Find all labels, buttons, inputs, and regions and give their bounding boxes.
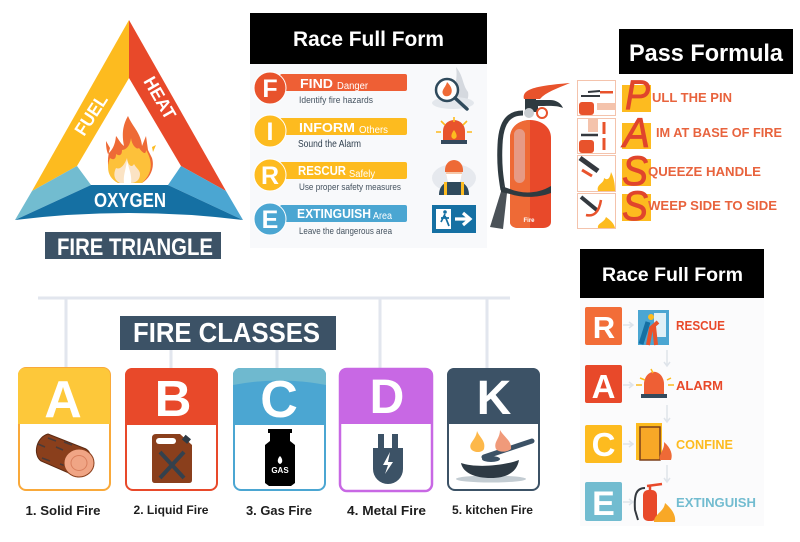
card K: kitchen fire: K — [477, 372, 512, 425]
card K: kitchen fire: 5. kitchen Fire — [452, 503, 533, 517]
card A: solid fire: 1. Solid Fire — [26, 503, 100, 518]
card B: liquid fire: B — [155, 370, 191, 427]
label: fire triangle: FIRE TRIANGLE — [57, 234, 213, 261]
triangle side: fuel: FUEL — [71, 91, 112, 139]
step: squeeze handle: S — [622, 147, 648, 194]
card K: kitchen fire — [447, 368, 540, 517]
heading: race full form — [250, 13, 487, 64]
card B: liquid fire — [125, 368, 218, 517]
row: alarm — [585, 365, 723, 405]
card A: solid fire — [18, 368, 110, 518]
card C: gas fire: GAS — [271, 466, 289, 475]
row: find danger: Danger — [337, 81, 369, 92]
step: sweep side to side: S — [622, 182, 648, 229]
tree connector lines — [38, 298, 510, 368]
triangle side: fuel — [32, 20, 129, 191]
row: extinguish — [585, 482, 756, 523]
row: extinguish: E — [592, 485, 615, 523]
row: confine: C — [592, 426, 615, 463]
row: extinguish area: Leave the dangerous area — [299, 226, 393, 237]
triangle side: oxygen: OXYGEN — [94, 190, 166, 212]
icon: exit sign — [432, 205, 476, 233]
icon: fire extinguisher: Fire — [523, 218, 535, 224]
step icon: pull — [578, 80, 616, 116]
step: squeeze handle — [622, 147, 761, 194]
step icon: squeeze — [578, 156, 616, 192]
icon: alarm beacon — [436, 117, 472, 144]
row: rescue safely: RESCUR — [298, 164, 346, 178]
row: rescue: RESCUE — [676, 318, 725, 333]
row: inform others: Sound the Alarm — [298, 139, 361, 150]
connector arrows — [623, 322, 670, 505]
row: inform others: INFORM — [299, 120, 355, 135]
row: extinguish area — [254, 203, 407, 237]
card A: solid fire: A — [44, 371, 82, 429]
step: aim at base of fire — [620, 109, 782, 156]
card C: gas fire: 3. Gas Fire — [246, 503, 312, 518]
icon: fire extinguisher — [490, 83, 570, 229]
row: find danger — [254, 72, 407, 106]
triangle side: oxygen — [15, 166, 243, 220]
card C: gas fire — [233, 368, 326, 518]
panel: FIRE race full form — [250, 13, 487, 248]
row: extinguish area: EXTINGUISH — [297, 207, 371, 221]
row: rescue safely: Safely — [349, 169, 375, 180]
heading: race full form — [580, 249, 764, 298]
card D: metal fire: D — [370, 371, 404, 424]
icon: magnifier on fire — [432, 67, 474, 109]
heading: race full form: Race Full Form — [602, 264, 743, 286]
step icon: aim — [578, 118, 616, 154]
panel: fire classes — [18, 298, 540, 518]
panel: pass formula — [490, 29, 793, 229]
step: pull the pin — [622, 71, 732, 118]
step icon: sweep — [578, 194, 616, 228]
icon: central flame — [106, 116, 156, 183]
row: extinguish area: E — [262, 206, 278, 234]
row: find danger: Identify fire hazards — [299, 95, 373, 106]
row: inform others: Others — [359, 125, 388, 136]
row: rescue safely — [254, 159, 407, 193]
step: sweep side to side: WEEP SIDE TO SIDE — [648, 198, 777, 213]
triangle side: heat — [129, 20, 226, 191]
row: inform others — [254, 115, 407, 150]
row: rescue: R — [593, 310, 615, 345]
step: pull the pin: ULL THE PIN — [652, 90, 732, 105]
row: alarm: ALARM — [676, 378, 723, 393]
panel: fire triangle — [15, 20, 243, 261]
row: extinguish: EXTINGUISH — [676, 495, 756, 510]
row: alarm: A — [592, 368, 615, 405]
row: find danger: FIND — [300, 76, 333, 91]
step panels: pull, aim, squeeze, sweep — [578, 80, 616, 228]
triangle side: heat: HEAT — [140, 73, 180, 123]
row: rescue — [585, 307, 725, 345]
step: squeeze handle: QUEEZE HANDLE — [648, 164, 761, 179]
step: pull the pin: P — [625, 71, 650, 118]
row: confine — [585, 423, 733, 463]
row: confine: CONFINE — [676, 437, 733, 452]
icon: firefighter — [432, 160, 476, 195]
heading: fire classes: FIRE CLASSES — [133, 317, 320, 348]
card D: metal fire — [339, 368, 433, 518]
panel: RACE full form — [580, 249, 764, 526]
heading: pass formula — [619, 29, 793, 74]
card C: gas fire: C — [260, 371, 298, 429]
heading: pass formula: Pass Formula — [629, 40, 784, 67]
heading: race full form: Race Full Form — [293, 28, 444, 51]
card D: metal fire: 4. Metal Fire — [347, 503, 426, 518]
row: rescue safely: R — [261, 162, 279, 190]
row: extinguish area: Area — [373, 211, 392, 222]
row: rescue safely: Use proper safety measures — [299, 182, 401, 193]
step: aim at base of fire: IM AT BASE OF FIRE — [656, 125, 782, 140]
step: aim at base of fire: A — [620, 109, 650, 156]
card B: liquid fire: 2. Liquid Fire — [134, 503, 209, 517]
row: find danger: F — [262, 75, 278, 103]
step: sweep side to side — [622, 182, 777, 229]
row: inform others: I — [267, 118, 273, 146]
